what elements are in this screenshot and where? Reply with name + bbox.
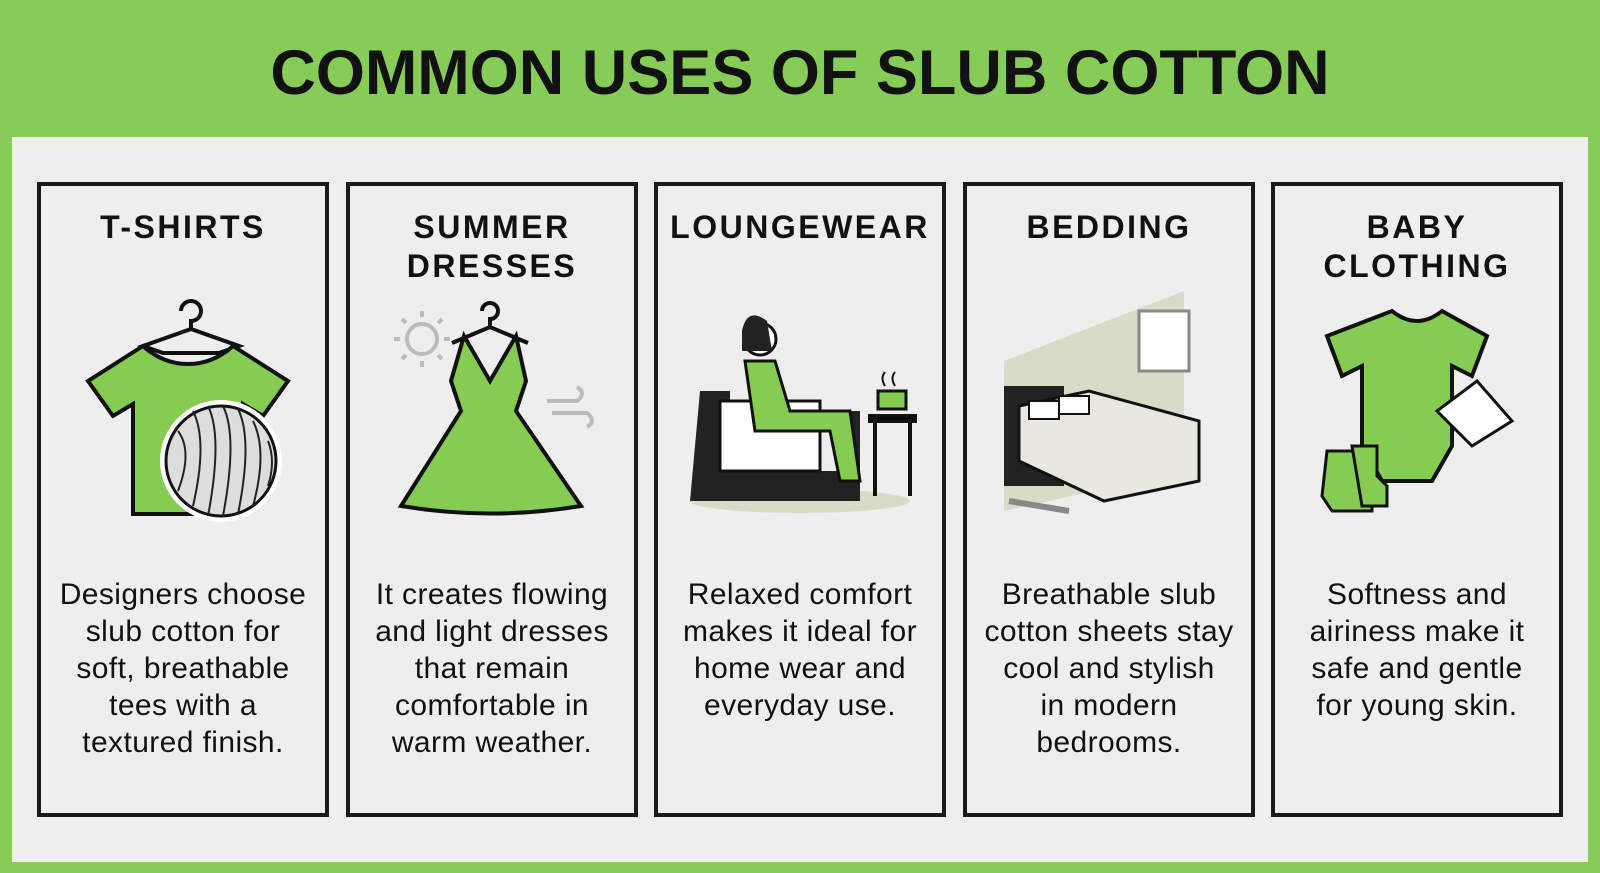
card: t-shirts: textured finish. [82, 726, 284, 759]
card: summer dresses: It creates flowing [376, 578, 608, 611]
card: t-shirts: slub cotton for [86, 615, 280, 648]
card: t-shirts: soft, breathable [76, 652, 290, 685]
card: summer dresses: SUMMER [413, 209, 571, 245]
card: baby clothing: CLOTHING [1323, 248, 1511, 284]
card: bedding [963, 182, 1255, 817]
icon: person in armchair [690, 315, 917, 513]
icon: onesie [1320, 308, 1514, 512]
card: loungewear: Relaxed comfort [688, 578, 912, 611]
card: summer dresses: and light dresses [375, 615, 609, 648]
card: t-shirts: tees with a [109, 689, 257, 722]
card: summer dresses: DRESSES [407, 248, 577, 284]
card: loungewear: home wear and [694, 652, 906, 685]
card: t-shirts: T-SHIRTS [100, 209, 266, 245]
card: t-shirts: Designers choose [60, 578, 306, 611]
card: loungewear: everyday use. [704, 689, 896, 722]
card: baby clothing: for young skin. [1316, 689, 1518, 722]
card: baby clothing: airiness make it [1310, 615, 1524, 648]
card: t-shirts [37, 182, 329, 817]
card: summer dresses [346, 182, 638, 817]
card: baby clothing: BABY [1367, 209, 1467, 245]
icon: bed [1004, 291, 1200, 514]
card: loungewear [654, 182, 946, 817]
card: bedding: Breathable slub [1002, 578, 1216, 611]
card: baby clothing: Softness and [1327, 578, 1507, 611]
card: baby clothing: safe and gentle [1311, 652, 1523, 685]
card: bedding: cotton sheets stay [984, 615, 1234, 648]
card: bedding: BEDDING [1026, 209, 1192, 245]
icon: t-shirt [85, 299, 291, 522]
card: baby clothing [1271, 182, 1563, 817]
card: summer dresses: that remain [415, 652, 569, 685]
card: loungewear: makes it ideal for [683, 615, 917, 648]
card: bedding: in modern [1040, 689, 1178, 722]
card: summer dresses: comfortable in [395, 689, 589, 722]
card: bedding: bedrooms. [1036, 726, 1182, 759]
icon: dress [394, 301, 594, 516]
card: loungewear: LOUNGEWEAR [670, 209, 930, 245]
title: COMMON USES OF SLUB COTTON [270, 38, 1330, 108]
card: summer dresses: warm weather. [392, 726, 592, 759]
card: bedding: cool and stylish [1003, 652, 1215, 685]
